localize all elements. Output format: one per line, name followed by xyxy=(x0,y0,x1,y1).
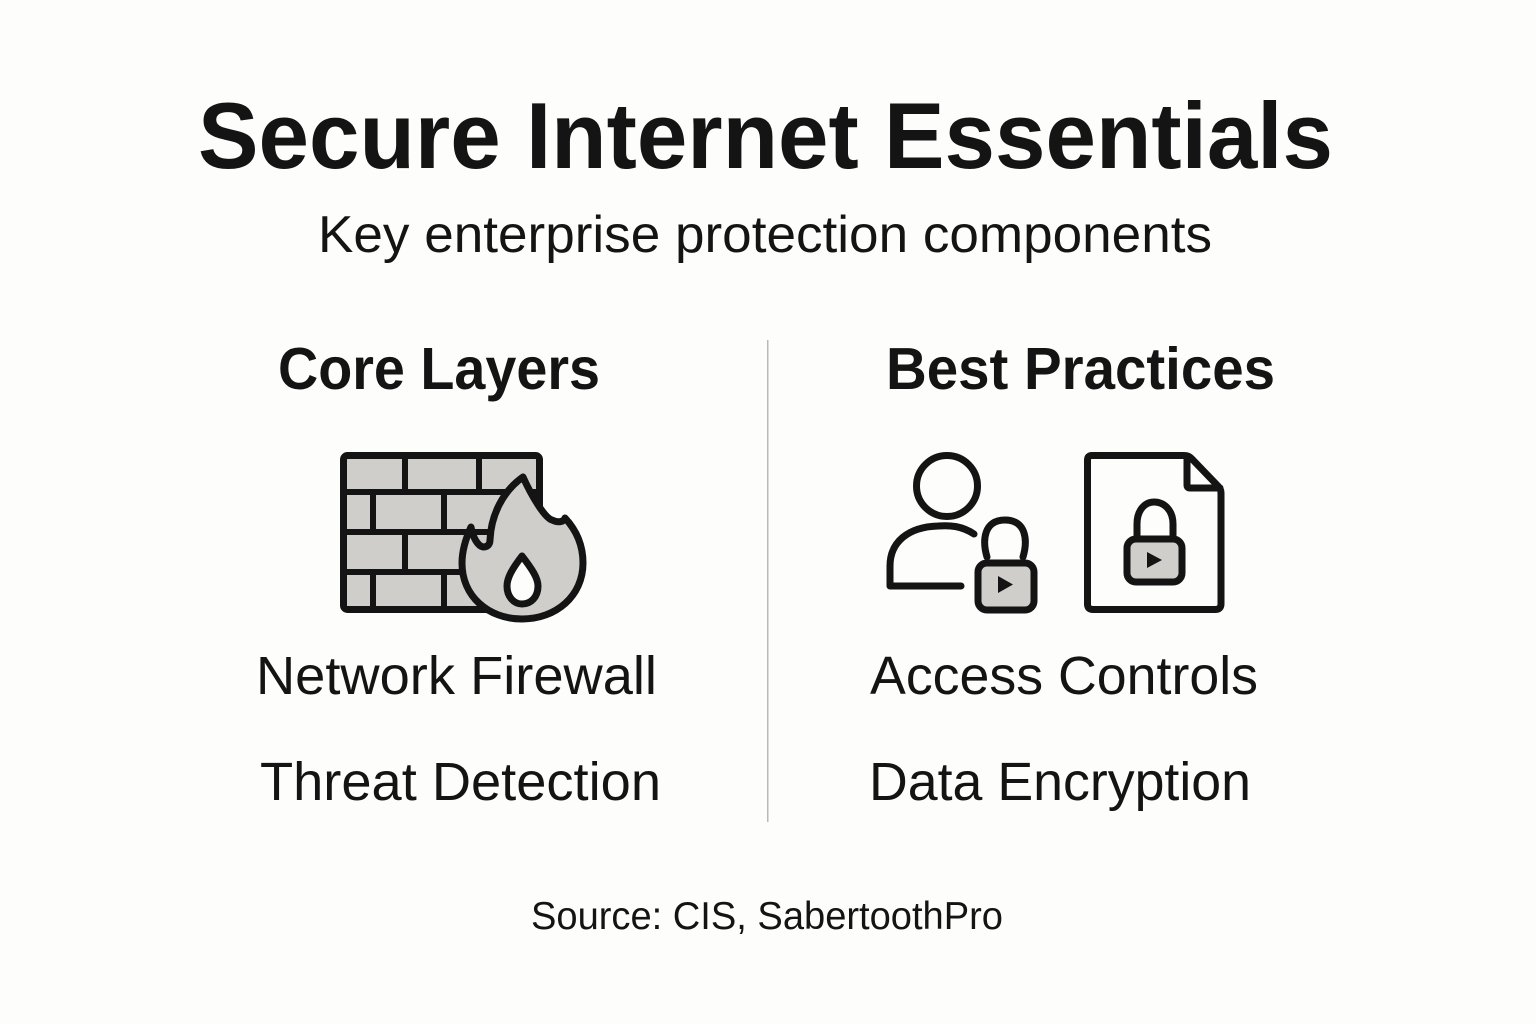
icon part: user shoulders xyxy=(890,526,974,586)
heading: core layers: Core Layers xyxy=(278,336,600,402)
label: threat detection: Threat Detection xyxy=(260,752,661,812)
label: network firewall: Network Firewall xyxy=(256,646,657,706)
icon part: document outline xyxy=(1088,456,1221,610)
icon part: play symbol xyxy=(1147,552,1162,568)
icon part: padlock shackle xyxy=(1137,502,1173,536)
icon part: brick wall xyxy=(344,456,540,610)
icon: user with padlock xyxy=(890,456,1034,610)
divider between columns xyxy=(767,340,768,822)
icon part: padlock body xyxy=(978,563,1034,610)
label: data encryption: Data Encryption xyxy=(869,752,1251,812)
icon part: play symbol xyxy=(998,576,1013,593)
icon part: folded corner xyxy=(1187,456,1220,488)
icon part: flame xyxy=(462,477,583,619)
icon part: padlock body xyxy=(1127,539,1182,582)
icon part: user head xyxy=(916,456,978,516)
panel: core layers xyxy=(256,336,661,812)
label: access controls: Access Controls xyxy=(870,646,1258,706)
icon: encrypted document xyxy=(1088,456,1221,610)
icon part: flame droplet xyxy=(507,556,538,604)
icon: brick firewall with flame xyxy=(344,456,583,619)
heading: best practices: Best Practices xyxy=(886,336,1275,402)
title: Secure Internet Essentials xyxy=(198,83,1333,188)
subtitle: Key enterprise protection components xyxy=(318,206,1212,264)
source note: Source: CIS, SabertoothPro xyxy=(531,895,1003,938)
panel: best practices xyxy=(869,336,1275,812)
icon part: padlock shackle xyxy=(985,520,1025,557)
